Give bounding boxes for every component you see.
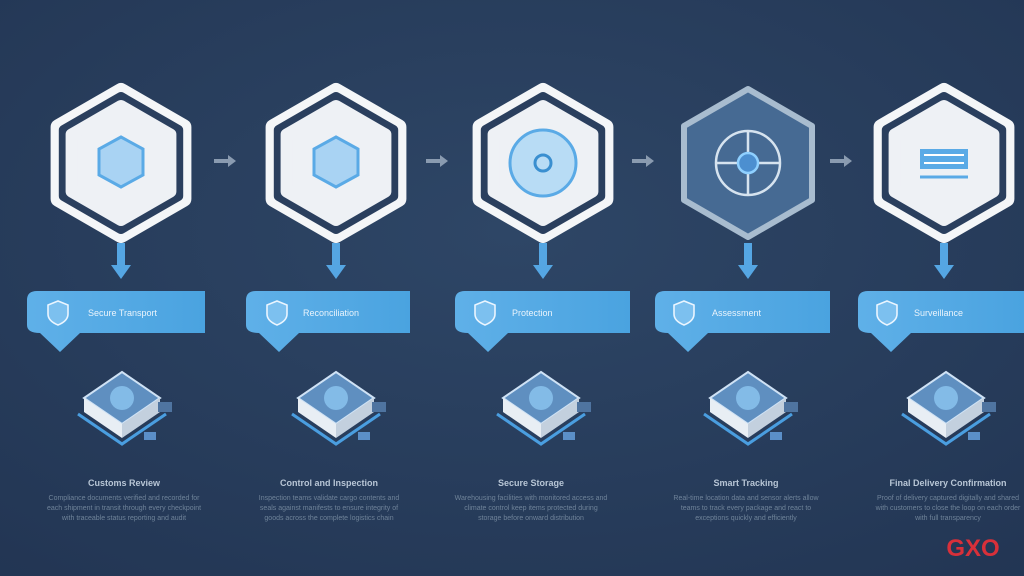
captions: Secure Storage	[498, 478, 564, 488]
captions: Smart Tracking	[713, 478, 779, 488]
body text lines	[47, 495, 1021, 522]
icon: document lines	[920, 149, 968, 177]
body text lines: with customers to close the loop on each order	[875, 505, 1021, 512]
body text lines: each shipment in transit through every checkpoint	[47, 505, 201, 512]
body text lines: exceptions quickly and efficiently	[695, 515, 797, 522]
step 5 hexagon	[882, 91, 1006, 235]
arrows down	[111, 243, 954, 279]
icon: circle gauge	[510, 130, 576, 196]
body text lines: climate control keep items protected during	[464, 505, 598, 512]
step 4 hexagon (blue)	[684, 89, 812, 237]
captions: Control and Inspection	[280, 478, 378, 488]
step 3 hexagon	[481, 91, 605, 235]
banner 5	[858, 291, 1024, 352]
body text lines: Compliance documents verified and recorded for	[49, 495, 200, 502]
banner 1	[27, 291, 205, 352]
icon: shield box	[99, 137, 143, 187]
banner 3: Protection	[512, 308, 553, 318]
body text lines: storage before onward distribution	[478, 515, 584, 522]
banner 2	[246, 291, 410, 352]
step 2 hexagon	[274, 91, 398, 235]
banner 5: Surveillance	[914, 308, 963, 318]
body text lines: Proof of delivery captured digitally and shared	[877, 495, 1019, 502]
step 1 hexagon	[59, 91, 183, 235]
banner 4	[655, 291, 830, 352]
banner 4: Assessment	[712, 308, 762, 318]
icon: cube	[314, 137, 358, 187]
captions: Final Delivery Confirmation	[889, 478, 1007, 488]
body text lines: Real-time location data and sensor alerts allow	[673, 495, 820, 502]
banner 1: Secure Transport	[88, 308, 158, 318]
arrows right	[214, 155, 852, 167]
banner 3	[455, 291, 630, 352]
icon: crosshair	[716, 131, 780, 195]
captions	[88, 478, 1007, 488]
body text lines: with traceable status reporting and audit	[61, 515, 186, 522]
banner 2: Reconciliation	[303, 308, 359, 318]
body text lines: Inspection teams validate cargo contents and	[259, 495, 399, 502]
watermark: GXO	[946, 535, 1000, 562]
captions: Customs Review	[88, 478, 161, 488]
body text lines: goods across the complete logistics chain	[264, 515, 394, 522]
body text lines: Warehousing facilities with monitored access and	[455, 495, 607, 502]
body text lines: teams to track every package and react to	[681, 505, 811, 512]
body text lines: with full transparency	[914, 515, 981, 522]
iso icons	[78, 372, 996, 444]
body text lines: seals against manifests to ensure integrity of	[260, 505, 398, 512]
